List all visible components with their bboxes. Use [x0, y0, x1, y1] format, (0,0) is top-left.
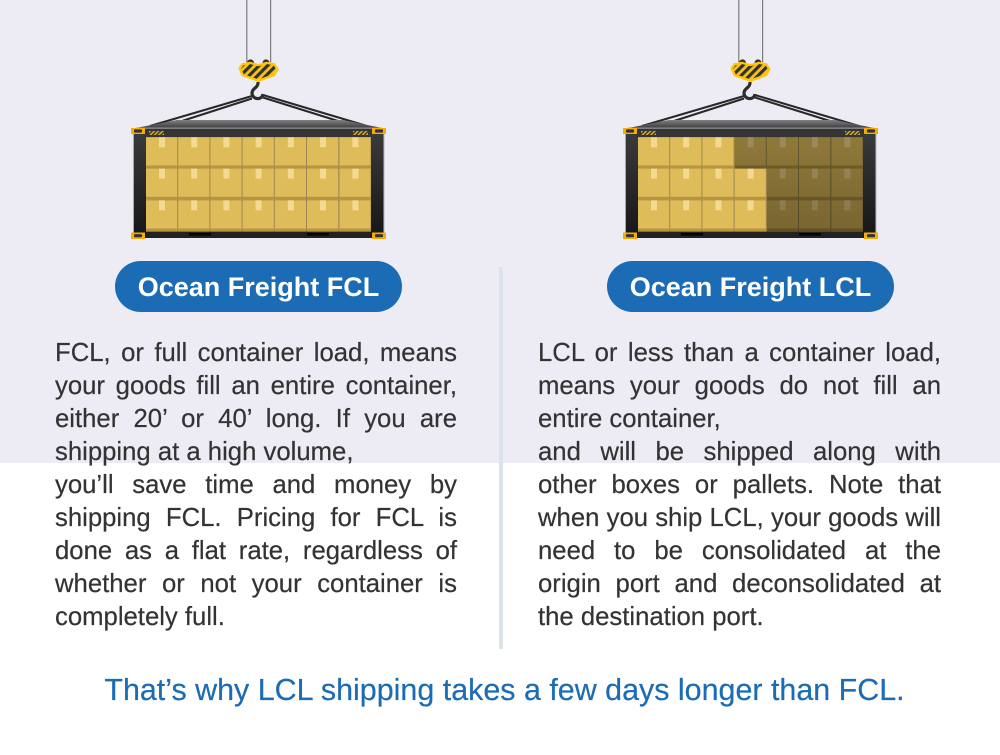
- text block: LCL description: when you ship LCL, your goods will: [538, 504, 941, 532]
- empty space shading: [735, 137, 863, 232]
- text block: FCL description: either 20’ or 40’ long. If you are: [55, 405, 457, 433]
- closing statement: That’s why LCL shipping takes a few days longer than FCL.: [104, 673, 905, 707]
- heading: Ocean Freight LCL: Ocean Freight LCL: [630, 272, 871, 302]
- heading: Ocean Freight LCL: [607, 261, 894, 312]
- text block: LCL description: and will be shipped along with: [538, 438, 941, 466]
- text block: LCL description: origin port and deconsolidated at: [538, 570, 941, 598]
- text block: LCL description: the destination port.: [538, 603, 764, 631]
- text block: LCL description: other boxes or pallets. Note that: [538, 471, 941, 499]
- text block: FCL description: completely full.: [55, 603, 225, 631]
- text block: LCL description: entire container,: [538, 405, 721, 433]
- text block: FCL description: FCL, or full container load, means: [55, 339, 457, 367]
- text block: FCL description: [54, 339, 458, 631]
- text block: FCL description: you’ll save time and money by: [55, 471, 457, 499]
- illustration: full FCL container on crane hook: [131, 0, 386, 239]
- text block: LCL description: need to be consolidated at the: [538, 537, 941, 565]
- text block: FCL description: your goods fill an entire container,: [55, 372, 457, 400]
- illustration: partly filled LCL container on crane hook: [623, 0, 878, 239]
- text block: LCL description: [538, 339, 941, 631]
- divider: [499, 267, 503, 649]
- text block: FCL description: whether or not your container is: [55, 570, 457, 598]
- heading: Ocean Freight FCL: Ocean Freight FCL: [138, 272, 379, 302]
- text block: FCL description: shipping at a high volume,: [55, 438, 353, 466]
- text block: FCL description: done as a flat rate, regardless of: [55, 537, 457, 565]
- text block: LCL description: LCL or less than a container load,: [538, 339, 941, 367]
- text block: LCL description: means your goods do not fill an: [538, 372, 941, 400]
- text block: FCL description: shipping FCL. Pricing for FCL is: [55, 504, 457, 532]
- heading: Ocean Freight FCL: [115, 261, 402, 312]
